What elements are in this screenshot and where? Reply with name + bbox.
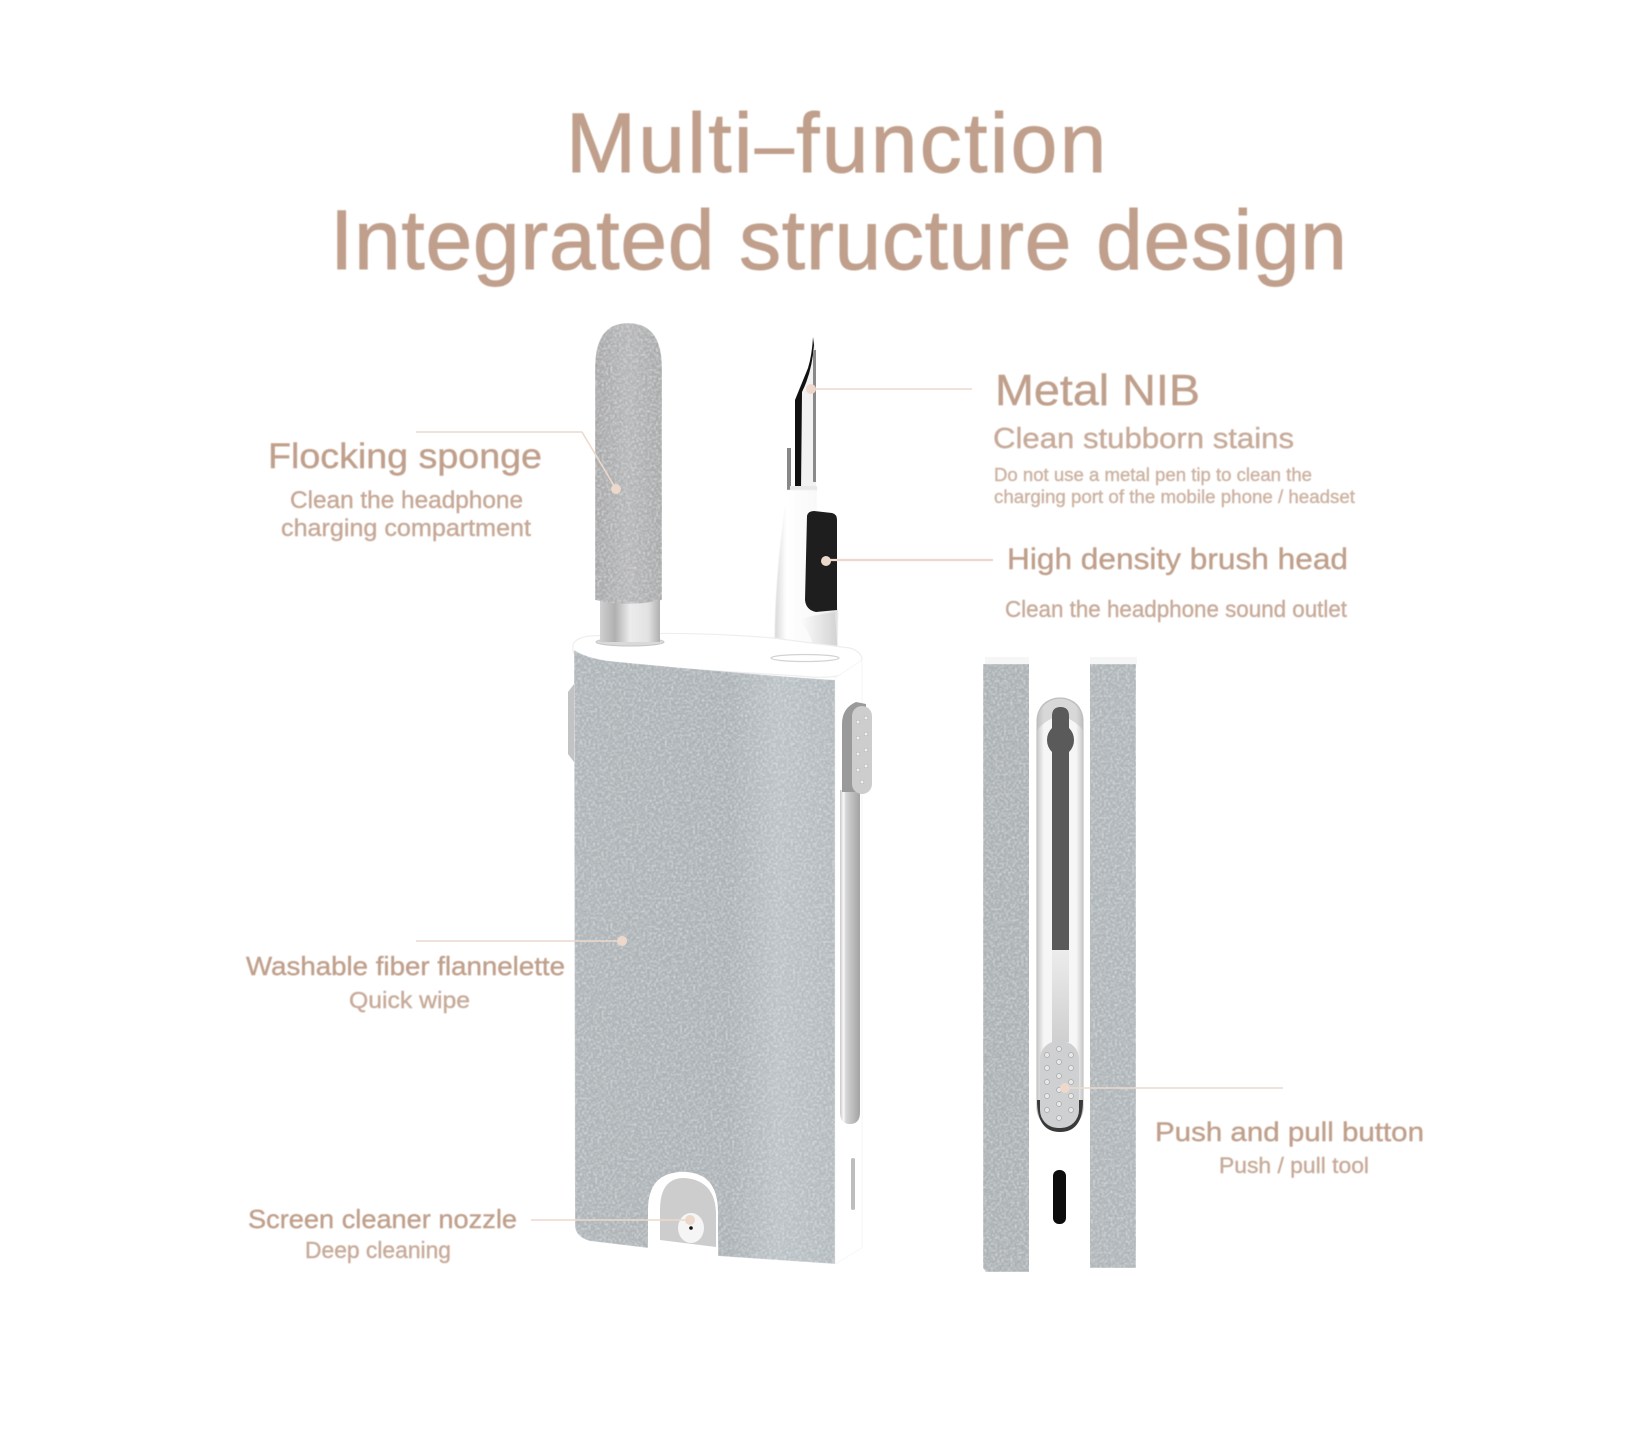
callout: flocking sponge: Flocking sponge [268, 437, 542, 476]
callout: flocking sponge: Clean the headphone [290, 487, 523, 514]
product: front view cleaning kit [568, 323, 872, 1264]
metal nib and brush tool [775, 337, 838, 660]
side grip bump [568, 684, 574, 762]
title: Integrated structure design [330, 193, 1347, 287]
dark rod [1047, 707, 1074, 1042]
product: side view [983, 656, 1137, 1274]
callout: nozzle [248, 1204, 517, 1263]
callout: push and pull button [1155, 1117, 1424, 1178]
callout: brush head: High density brush head [1007, 543, 1348, 576]
callout: metal nib: Metal NIB [995, 366, 1200, 415]
callout: nozzle: Screen cleaner nozzle [248, 1204, 517, 1234]
callout: flocking sponge: charging compartment [281, 515, 531, 542]
leader lines [416, 389, 1283, 1220]
callout: metal nib: charging port of the mobile phone / headset [994, 487, 1355, 507]
callout: push and pull button: Push / pull tool [1219, 1153, 1369, 1178]
flocking sponge tool [595, 323, 662, 642]
white top cap [573, 633, 862, 677]
flannelette body [574, 650, 835, 1264]
callout: flannelette: Quick wipe [349, 987, 470, 1013]
callout: push and pull button: Push and pull button [1155, 1117, 1424, 1147]
callout: nozzle: Deep cleaning [305, 1237, 451, 1263]
callout: metal nib [993, 366, 1355, 507]
title: Multi [566, 96, 755, 190]
nozzle recess [648, 1172, 718, 1256]
callout: metal nib: Clean stubborn stains [993, 423, 1294, 455]
slot [1037, 698, 1083, 1130]
top cap highlight [985, 657, 1137, 665]
dark slit [1053, 1170, 1066, 1224]
leader dots [611, 384, 1070, 1225]
side slot and push button [840, 702, 872, 1210]
callout: flannelette: Washable fiber flannelette [246, 951, 565, 981]
title [330, 96, 1347, 287]
white side strip [835, 660, 862, 1264]
callout: flocking sponge [268, 437, 542, 542]
title: – [755, 106, 796, 184]
fabric panels [983, 664, 1030, 1272]
callout: brush head: Clean the headphone sound outlet [1005, 596, 1348, 622]
title: function [796, 96, 1109, 190]
white centre strip [1029, 656, 1090, 1274]
callout: flannelette [246, 951, 565, 1013]
callout: brush head [1005, 543, 1348, 622]
push button [1037, 1041, 1083, 1132]
callout: metal nib: Do not use a metal pen tip to clean the [994, 465, 1312, 485]
